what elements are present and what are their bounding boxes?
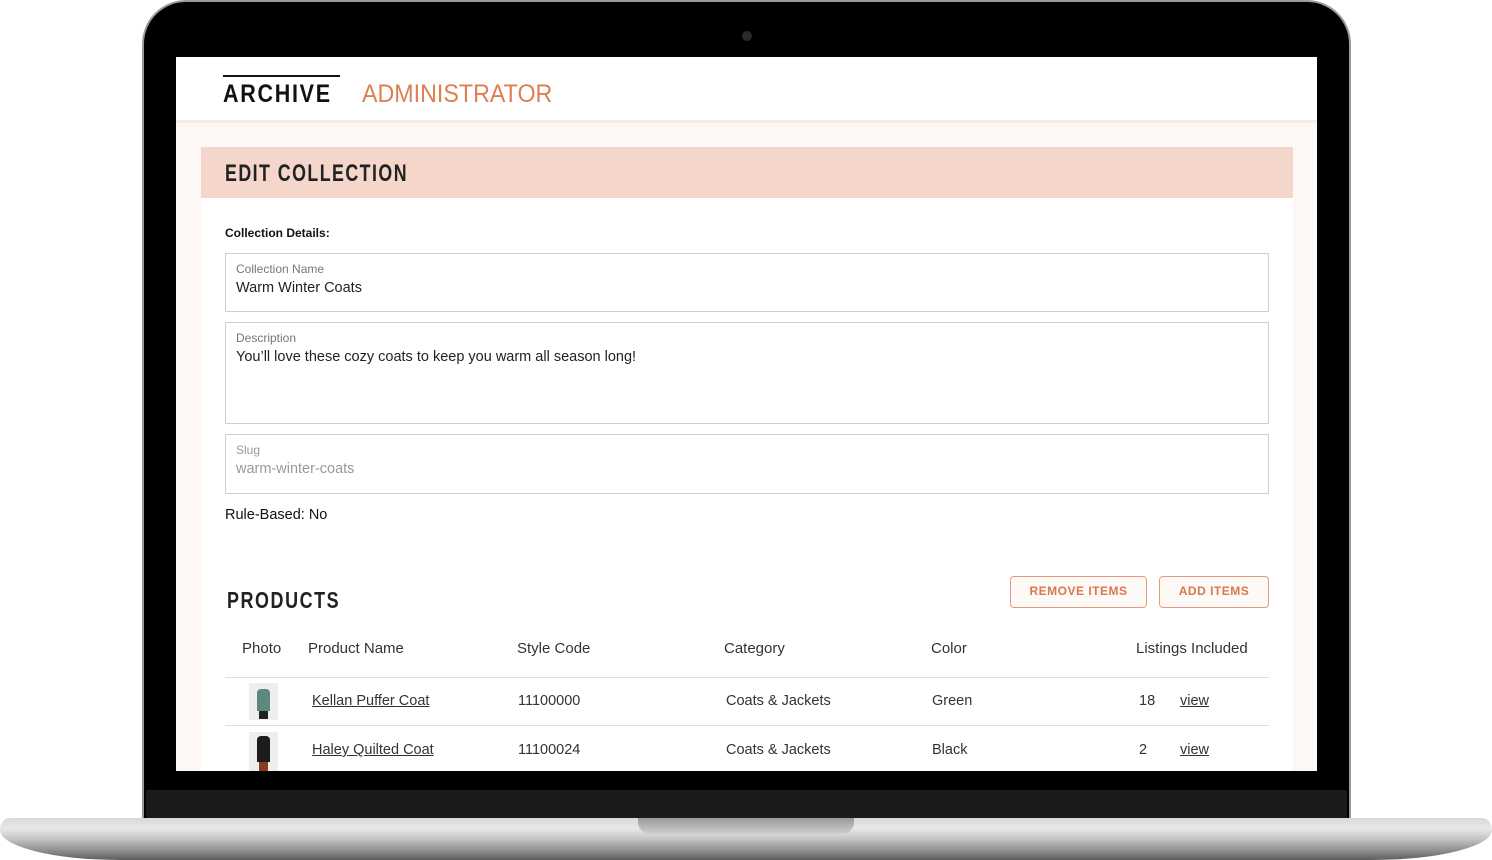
field: description: Description	[236, 331, 296, 345]
field: collection name: Warm Winter Coats	[236, 280, 362, 296]
heading: products: PRODUCTS	[227, 587, 340, 613]
field: slug	[225, 434, 1269, 494]
laptop base	[0, 818, 1492, 860]
panel: edit collection	[201, 147, 1293, 771]
header bar	[176, 57, 1317, 123]
heading bar	[201, 147, 1293, 198]
table row: Kellan: Kellan Puffer Coat	[312, 693, 429, 709]
base notch	[638, 818, 854, 834]
bottom bezel band	[146, 790, 1347, 820]
table row: Kellan: view	[1180, 693, 1209, 709]
button: add items	[1159, 576, 1269, 608]
table row: Haley: view	[1180, 742, 1209, 758]
button: add items: ADD ITEMS	[1179, 584, 1249, 598]
laptop bezel	[142, 0, 1351, 822]
table row: Kellan: 11100000	[518, 693, 580, 709]
table header: Style Code	[517, 640, 590, 657]
camera	[742, 31, 752, 41]
field: collection name: Collection Name	[236, 262, 324, 276]
field: collection name	[225, 253, 1269, 312]
table header: Product Name	[308, 640, 404, 657]
table row: Haley: Haley Quilted Coat	[312, 742, 434, 758]
table header	[225, 630, 1269, 678]
field: description	[225, 322, 1269, 424]
text: rule-based: Rule-Based: No	[225, 507, 327, 523]
table row: Haley: 2	[1139, 742, 1147, 758]
icon: photo black coat	[249, 732, 278, 771]
table row: Haley	[249, 732, 1209, 771]
table header: Category	[724, 640, 785, 657]
table row: Haley: 11100024	[518, 742, 580, 758]
icon: photo green coat	[249, 683, 278, 720]
field: slug: warm-winter-coats	[236, 461, 354, 477]
table header: Listings Included	[1136, 640, 1248, 657]
table header: Color	[931, 640, 967, 657]
table row: Kellan: Coats & Jackets	[726, 693, 831, 709]
label: collection details: Collection Details:	[225, 226, 330, 240]
table row: Kellan	[225, 678, 1269, 726]
table row: Haley: Coats & Jackets	[726, 742, 831, 758]
field: slug: Slug	[236, 443, 260, 457]
field: description: You’ll love these cozy coats to keep you warm all season long!	[236, 349, 636, 365]
heading text: EDIT COLLECTION	[225, 160, 408, 187]
table row: Kellan: 18	[1139, 693, 1155, 709]
logo: ARCHIVE: ARCHIVE	[223, 80, 332, 108]
logo: ADMINISTRATOR: ADMINISTRATOR	[362, 80, 552, 108]
screen	[176, 57, 1317, 771]
table row: Haley: Black	[932, 742, 967, 758]
button: remove items: REMOVE ITEMS	[1029, 584, 1128, 598]
button: remove items	[1010, 576, 1147, 608]
table header: Photo	[242, 640, 281, 657]
table row: Kellan: Green	[932, 693, 972, 709]
